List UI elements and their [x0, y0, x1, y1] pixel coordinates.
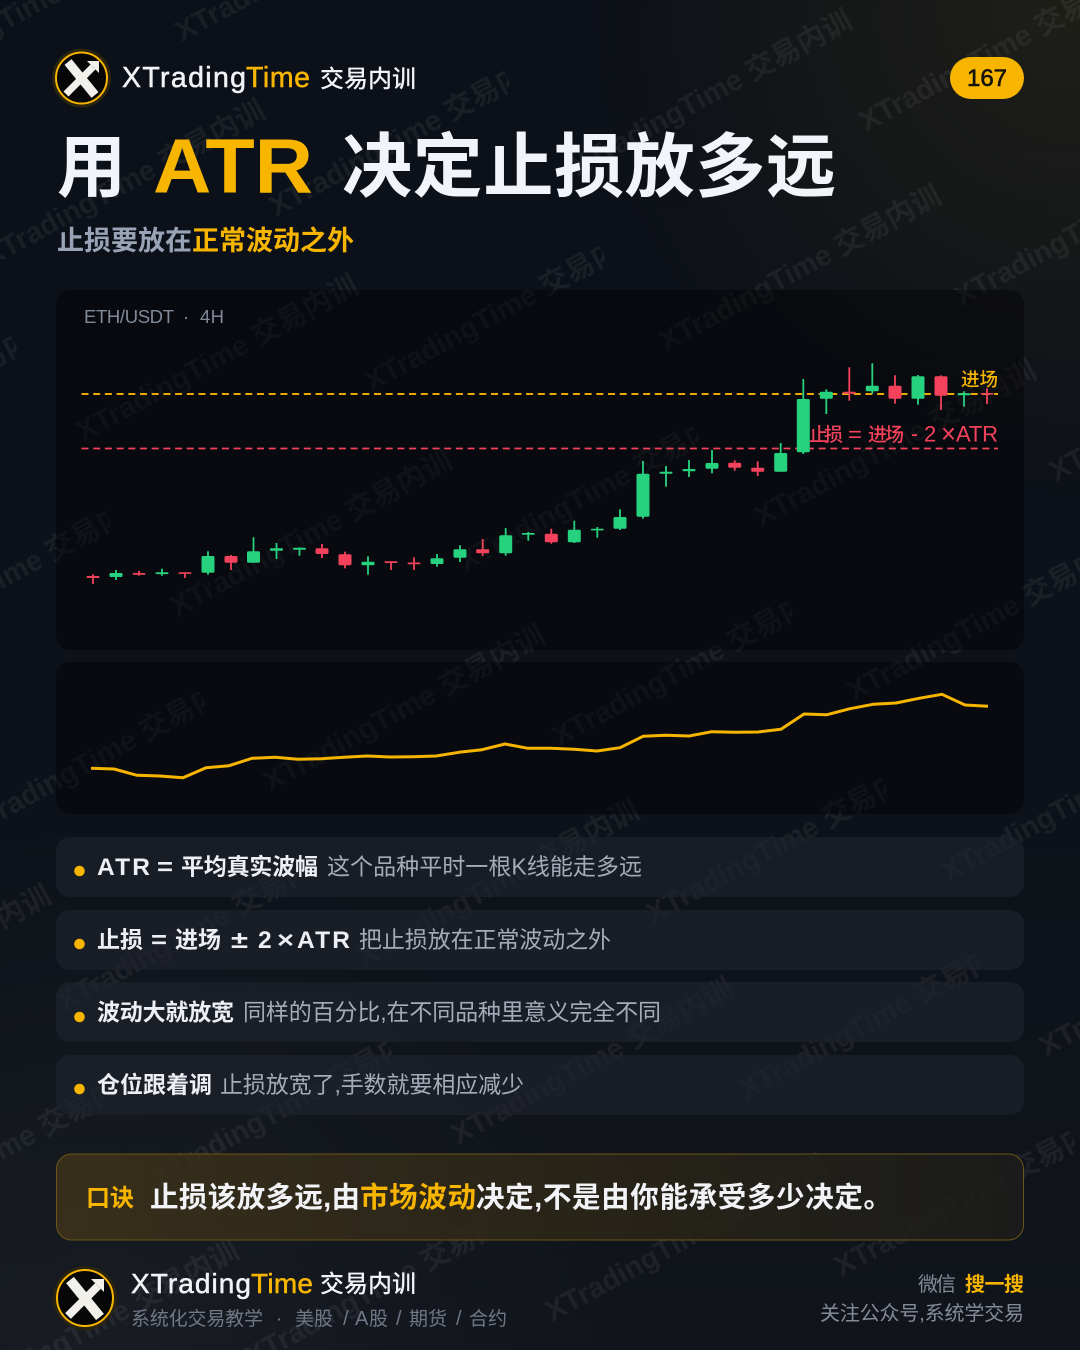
watermark pattern: XTradingTime 交易内训 — [258, 619, 550, 798]
rule row 1 — [56, 837, 1024, 897]
header brand name: XTrading — [122, 62, 246, 94]
footer wechat search: 搜一搜 — [965, 1273, 1024, 1296]
footer tagline: 股 — [369, 1309, 388, 1330]
footer tagline: / — [343, 1308, 349, 1330]
header logo — [52, 48, 111, 108]
footer tagline: 合约 — [469, 1308, 507, 1330]
rule row 2: 止损 — [97, 926, 143, 952]
watermark pattern: XTradingTime 交易内训 — [565, 4, 857, 183]
rule row 1: = — [157, 854, 173, 881]
watermark pattern: XTradingTime 交易内训 — [453, 399, 745, 578]
pair and timeframe label: · — [183, 306, 189, 327]
entry price line — [82, 393, 998, 395]
pair and timeframe label: ETH/USDT — [84, 306, 174, 327]
panel: ATR line chart — [56, 662, 1024, 814]
rule row 2: 2 — [258, 927, 272, 954]
footer tagline: A — [355, 1308, 369, 1330]
watermark pattern: XTradingTime 交易内训 — [654, 179, 946, 358]
footer follow text: 关注公众号,系统学交易 — [820, 1302, 1024, 1325]
rule row 4: 仓位跟着调 — [97, 1072, 212, 1098]
subtitle: 正常波动之外 — [192, 226, 354, 256]
footer tagline: 期货 — [409, 1308, 447, 1330]
rule row 2: = — [151, 927, 167, 954]
rule row 2: ATR — [297, 927, 350, 954]
watermark pattern: XTradingTime 交易内训 — [749, 354, 1041, 533]
stop loss formula label — [809, 418, 998, 449]
rule row 4: 止损放宽了,手数就要相应减少 — [220, 1072, 524, 1098]
title: 用 — [57, 129, 126, 206]
entry label: 进场 — [961, 369, 998, 390]
watermark pattern: XTradingTime 交易内训 — [165, 444, 457, 623]
rule row 2: 把止损放在正常波动之外 — [359, 926, 611, 952]
footer tagline: 系统化交易教学 — [131, 1308, 263, 1330]
header brand name — [122, 62, 416, 94]
footer logo — [53, 1266, 117, 1330]
footer tagline: · — [276, 1309, 282, 1330]
watermark pattern: XTradingTime 交易内训 — [352, 794, 644, 973]
rule row 3: 同样的百分比,在不同品种里意义完全不同 — [243, 999, 661, 1025]
watermark pattern: XTradingTime 交易内训 — [446, 972, 738, 1151]
watermark pattern: XTradingTime 交易内训 — [540, 1149, 832, 1328]
rule row 4 — [56, 1055, 1024, 1115]
watermark pattern: XTradingTime 交易内训 — [146, 1014, 438, 1193]
candlesticks — [86, 363, 994, 584]
rule row 2: ± — [231, 927, 248, 954]
footer tagline: 美股 — [295, 1308, 333, 1330]
issue number badge — [950, 57, 1024, 99]
stop loss formula label: 进场 — [868, 424, 904, 446]
callout: mnemonic — [56, 1154, 1024, 1240]
rule row 1: 平均真实波幅 — [181, 854, 318, 880]
stop loss price line — [82, 448, 998, 450]
title: 决定止损放多远 — [342, 128, 836, 206]
watermark pattern: XTradingTime 交易内训 — [264, 44, 556, 223]
watermark pattern: XTradingTime 交易内训 — [71, 269, 363, 448]
stop loss formula label: × — [941, 418, 956, 449]
rule row 2: × — [277, 927, 294, 954]
footer wechat search — [918, 1273, 1024, 1296]
watermark pattern: XTradingTime 交易内训 — [547, 574, 839, 753]
title — [57, 124, 836, 210]
rule row 3 — [56, 982, 1024, 1042]
rule row 1: ATR — [97, 854, 150, 881]
subtitle: 止损要放在 — [57, 226, 192, 256]
watermark pattern: XTradingTime 交易内训 — [359, 219, 651, 398]
footer brand name: 交易内训 — [320, 1271, 416, 1298]
rule row 2 — [56, 910, 1024, 970]
footer brand name: XTrading — [131, 1268, 251, 1299]
callout: mnemonic: 决定,不是由你能承受多少决定。 — [476, 1182, 892, 1214]
rule row 3: 波动大就放宽 — [97, 999, 234, 1025]
rule row 2: 进场 — [175, 926, 221, 952]
issue number badge: 167 — [967, 65, 1007, 92]
footer tagline: / — [456, 1308, 462, 1330]
pair and timeframe label — [84, 306, 224, 327]
callout: mnemonic: 口诀 — [86, 1185, 134, 1212]
footer brand name — [131, 1268, 416, 1299]
header brand name: 交易内训 — [320, 66, 416, 93]
callout: mnemonic: 止损该放多远,由 — [150, 1182, 360, 1214]
callout: mnemonic: 市场波动 — [360, 1182, 476, 1214]
stop loss formula label: 止损 — [809, 424, 843, 446]
stop loss formula label: 2 — [924, 422, 936, 446]
pair and timeframe label: 4H — [200, 306, 224, 327]
stop loss formula label: - — [911, 421, 918, 446]
footer tagline: / — [396, 1308, 402, 1330]
footer tagline — [131, 1308, 507, 1330]
subtitle — [57, 226, 354, 256]
panel: candlestick chart — [56, 290, 1024, 650]
header brand name: Time — [246, 62, 310, 94]
watermark pattern: XTradingTime 交易内训 — [734, 927, 1026, 1106]
stop loss formula label: ATR — [956, 422, 998, 446]
rule row 1: 这个品种平时一根K线能走多远 — [327, 854, 642, 880]
footer wechat search: 微信 — [918, 1273, 956, 1296]
watermark pattern: XTradingTime 交易内训 — [641, 751, 933, 930]
title: ATR — [153, 124, 313, 210]
footer brand name: Time — [251, 1268, 313, 1299]
watermark pattern: XTradingTime 交易内训 — [52, 839, 344, 1018]
stop loss formula label: = — [848, 422, 862, 447]
